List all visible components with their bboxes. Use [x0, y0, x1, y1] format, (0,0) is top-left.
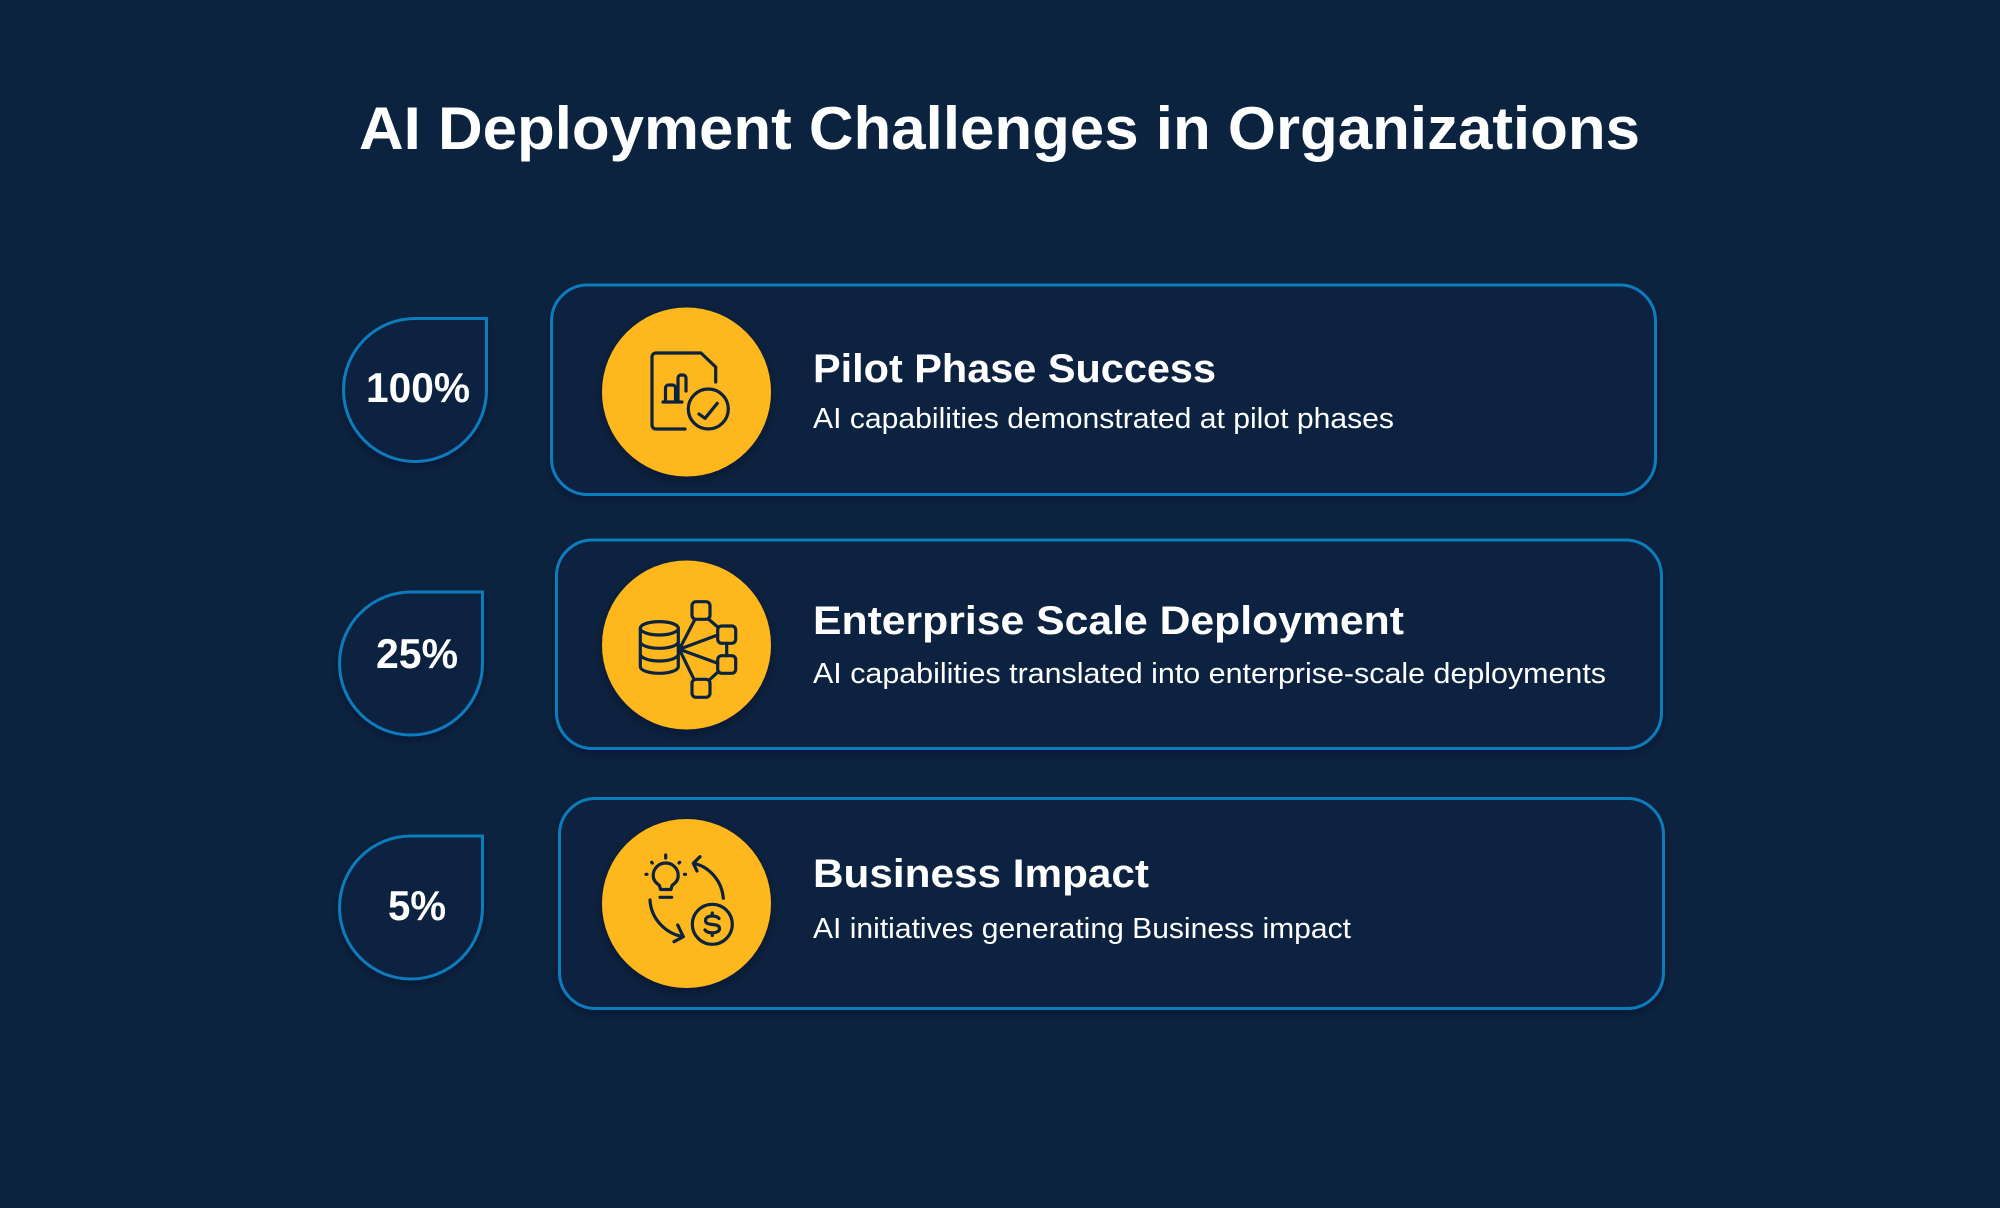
heading: Enterprise Scale Deployment: [813, 599, 1404, 643]
description: AI initiatives generating Business impact: [813, 913, 1351, 945]
icon: report document with check mark: [602, 308, 771, 476]
heading: Business Impact: [813, 852, 1149, 896]
panel: enterprise scale deployment: [556, 540, 1662, 748]
panel: pilot phase success: [552, 285, 1656, 494]
row: pilot phase success: [344, 285, 1656, 494]
description: AI capabilities translated into enterprise-scale deployments: [813, 658, 1606, 690]
row: enterprise scale deployment: [340, 540, 1662, 748]
percentage badge: 25%: 25%: [376, 630, 458, 677]
icon: database connected to network nodes: [602, 560, 771, 730]
heading: Pilot Phase Success: [813, 347, 1216, 391]
percentage badge: 100%: [344, 318, 486, 462]
percentage badge: 100%: 100%: [366, 364, 470, 411]
percentage badge: 25%: [340, 592, 482, 735]
row: business impact: [340, 798, 1664, 1008]
panel: business impact: [560, 798, 1664, 1008]
title: AI Deployment Challenges in Organizations: [359, 95, 1640, 162]
percentage badge: 5%: [340, 836, 482, 979]
percentage badge: 5%: 5%: [388, 882, 446, 929]
icon: idea and money cycle: [602, 819, 771, 988]
description: AI capabilities demonstrated at pilot phases: [813, 403, 1394, 435]
